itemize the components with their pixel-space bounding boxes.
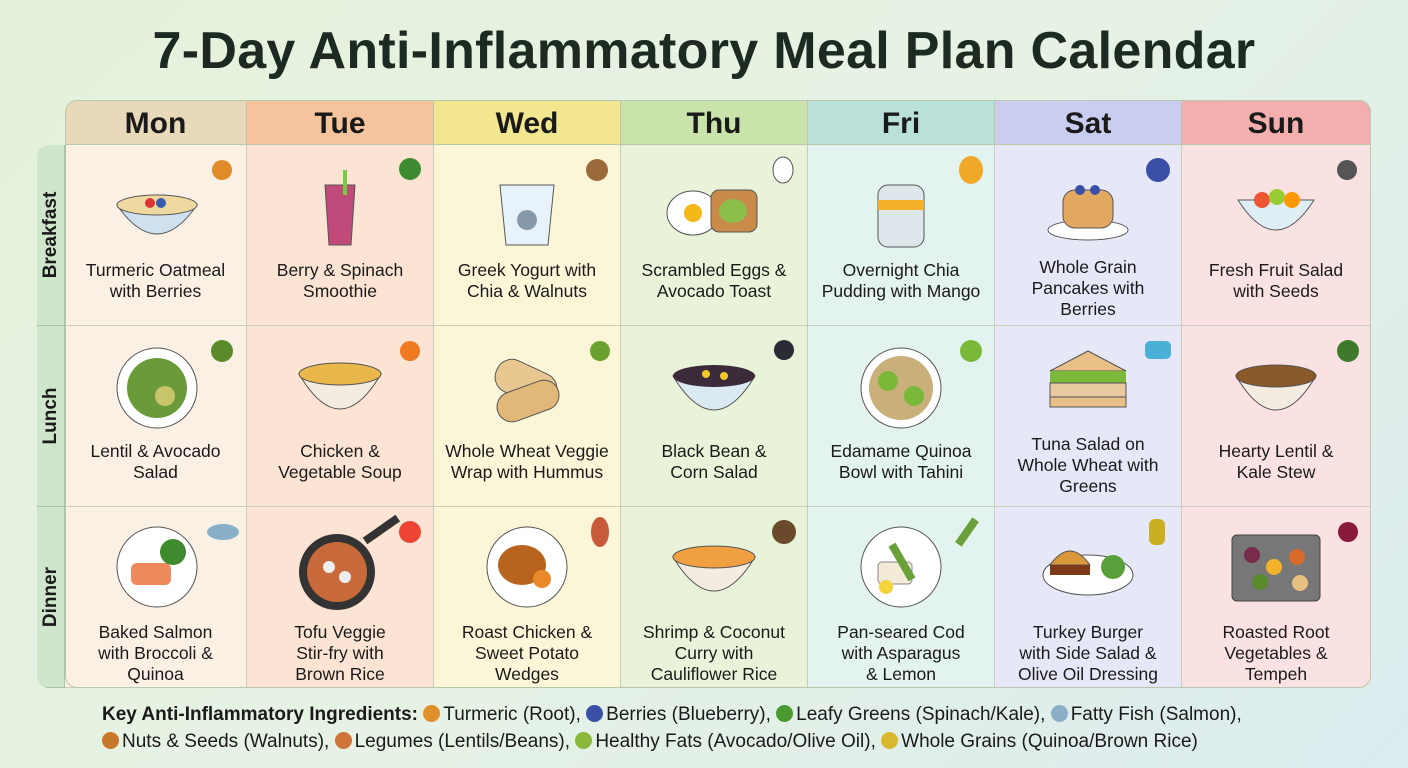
- Fri dinner: & Lemon: [866, 664, 936, 684]
- Sat lunch: [995, 326, 1182, 507]
- header: days: Sun: [1248, 107, 1304, 140]
- Sun breakfast: [1182, 145, 1371, 326]
- Mon lunch: Lentil & Avocado: [90, 441, 221, 461]
- row labels: Dinner: [40, 567, 60, 627]
- header: days: Mon: [125, 107, 186, 140]
- Sun breakfast: Fresh Fruit Salad: [1209, 260, 1343, 280]
- Sun lunch: Hearty Lentil &: [1219, 441, 1333, 461]
- Tue lunch: [247, 326, 434, 507]
- Sat dinner: Turkey Burger: [1033, 622, 1143, 642]
- Sun dinner: Vegetables &: [1224, 643, 1328, 663]
- Thu breakfast: [621, 145, 808, 326]
- Tue dinner: Tofu Veggie: [294, 622, 386, 642]
- Fri dinner: with Asparagus: [842, 643, 960, 663]
- Fri breakfast: Pudding with Mango: [822, 281, 980, 301]
- Thu lunch: Black Bean &: [661, 441, 767, 461]
- Tue breakfast: [247, 145, 434, 326]
- Wed lunch: [434, 326, 621, 507]
- Wed lunch: Whole Wheat Veggie: [445, 441, 609, 461]
- header: days: Wed: [496, 107, 558, 140]
- Thu dinner: Cauliflower Rice: [651, 664, 777, 684]
- row labels: Lunch: [40, 388, 60, 444]
- row labels: Breakfast: [40, 192, 60, 278]
- Wed lunch: Wrap with Hummus: [451, 462, 603, 482]
- Sun lunch: Kale Stew: [1237, 462, 1315, 482]
- Mon breakfast: Turmeric Oatmeal: [86, 260, 225, 280]
- Fri lunch: Edamame Quinoa: [830, 441, 972, 461]
- Mon dinner: [65, 507, 247, 688]
- Wed dinner: [434, 507, 621, 688]
- Sat lunch: Whole Wheat with: [1017, 455, 1159, 475]
- header: days: Sat: [1065, 107, 1111, 140]
- Sat lunch: Greens: [1059, 476, 1117, 496]
- Tue dinner: Brown Rice: [295, 664, 385, 684]
- Thu dinner: [621, 507, 808, 688]
- Fri breakfast: [808, 145, 995, 326]
- Sun dinner: Roasted Root: [1222, 622, 1330, 642]
- calendar grid: [37, 100, 1371, 688]
- Mon dinner: Baked Salmon: [99, 622, 212, 642]
- Mon lunch: Salad: [133, 462, 178, 482]
- Thu dinner: Curry with: [675, 643, 753, 663]
- Mon dinner: Quinoa: [127, 664, 184, 684]
- Sat dinner: [995, 507, 1182, 688]
- row labels: [37, 145, 65, 688]
- Mon breakfast: [65, 145, 247, 326]
- Sun dinner: [1182, 507, 1371, 688]
- Fri lunch: Bowl with Tahini: [839, 462, 963, 482]
- header: days: Thu: [686, 107, 741, 140]
- Thu dinner: Shrimp & Coconut: [643, 622, 785, 642]
- Tue lunch: Vegetable Soup: [278, 462, 402, 482]
- Sat lunch: Tuna Salad on: [1031, 434, 1145, 454]
- cells: [65, 145, 1371, 688]
- Mon dinner: with Broccoli &: [98, 643, 213, 663]
- Wed breakfast: Greek Yogurt with: [458, 260, 596, 280]
- Thu lunch: [621, 326, 808, 507]
- Tue lunch: Chicken &: [300, 441, 380, 461]
- header: days: Fri: [882, 107, 920, 140]
- Mon lunch: [65, 326, 247, 507]
- Thu breakfast: Avocado Toast: [657, 281, 771, 301]
- Tue breakfast: Berry & Spinach: [277, 260, 403, 280]
- Wed dinner: Roast Chicken &: [462, 622, 592, 642]
- Fri breakfast: Overnight Chia: [843, 260, 959, 280]
- Sat breakfast: Whole Grain: [1039, 257, 1137, 277]
- Sat breakfast: Pancakes with: [1032, 278, 1144, 298]
- Tue dinner: [247, 507, 434, 688]
- title: 7-Day Anti-Inflammatory Meal Plan Calendar: [153, 22, 1255, 80]
- header: days: [66, 100, 1371, 145]
- Thu lunch: Corn Salad: [670, 462, 758, 482]
- Fri dinner: [808, 507, 995, 688]
- grid outline: [65, 100, 1371, 688]
- legend line 1: Key Anti-Inflammatory Ingredients: Turmeric (Root), Berries (Blueberry), Leafy Greens (Spinach/Kale), Fatty Fish (Salmon),: [102, 704, 1242, 725]
- Sat dinner: with Side Salad &: [1019, 643, 1157, 663]
- Sun dinner: Tempeh: [1245, 664, 1307, 684]
- Tue breakfast: Smoothie: [303, 281, 377, 301]
- Sun lunch: [1182, 326, 1371, 507]
- Thu breakfast: Scrambled Eggs &: [642, 260, 786, 280]
- Mon breakfast: with Berries: [110, 281, 201, 301]
- Wed dinner: Sweet Potato: [475, 643, 579, 663]
- Tue dinner: Stir-fry with: [296, 643, 384, 663]
- Sun breakfast: with Seeds: [1233, 281, 1319, 301]
- Sat breakfast: Berries: [1060, 299, 1116, 319]
- Wed dinner: Wedges: [495, 664, 559, 684]
- Wed breakfast: Chia & Walnuts: [467, 281, 587, 301]
- Sat dinner: Olive Oil Dressing: [1018, 664, 1158, 684]
- Wed breakfast: [434, 145, 621, 326]
- Fri lunch: [808, 326, 995, 507]
- Sat breakfast: [995, 145, 1182, 326]
- Fri dinner: Pan-seared Cod: [837, 622, 965, 642]
- legend line 2: Nuts & Seeds (Walnuts), Legumes (Lentils/Beans), Healthy Fats (Avocado/Olive Oil), Whole Grains (Quinoa/Brown Rice): [122, 731, 1198, 752]
- header: days: Tue: [314, 107, 366, 140]
